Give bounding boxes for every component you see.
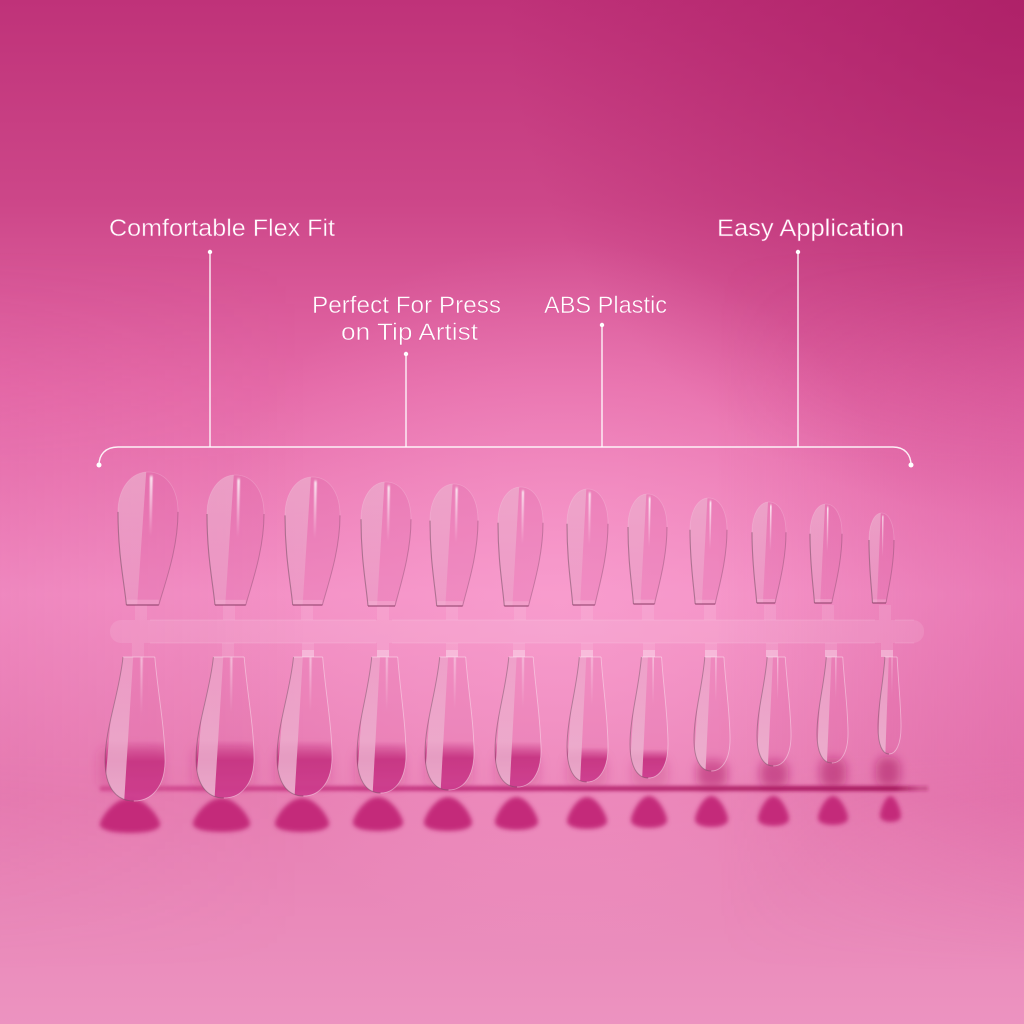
horizontal bar shadow [100, 786, 928, 791]
cast shadows on the surface [98, 747, 928, 833]
lower row of nail tips [104, 657, 901, 801]
label: Easy Application: Easy Application [717, 215, 904, 242]
label: ABS Plastic: ABS Plastic [544, 292, 667, 319]
upper shadows visible below short nails [697, 757, 900, 788]
upper row of nail tips [117, 472, 894, 606]
label: Perfect For Press on Tip Artist [312, 292, 501, 346]
ground shadow blobs [100, 796, 901, 833]
soft upper shadows behind lower nails [98, 747, 668, 789]
bracket and leader lines [96, 250, 914, 468]
label: Perfect For Press on Tip Artist: on Tip Artist [341, 319, 478, 346]
label: Perfect For Press on Tip Artist: Perfect For Press [312, 292, 501, 319]
nail tip carrier bar with stems [110, 605, 924, 657]
label: Comfortable Flex Fit: Comfortable Flex Fit [109, 215, 335, 242]
